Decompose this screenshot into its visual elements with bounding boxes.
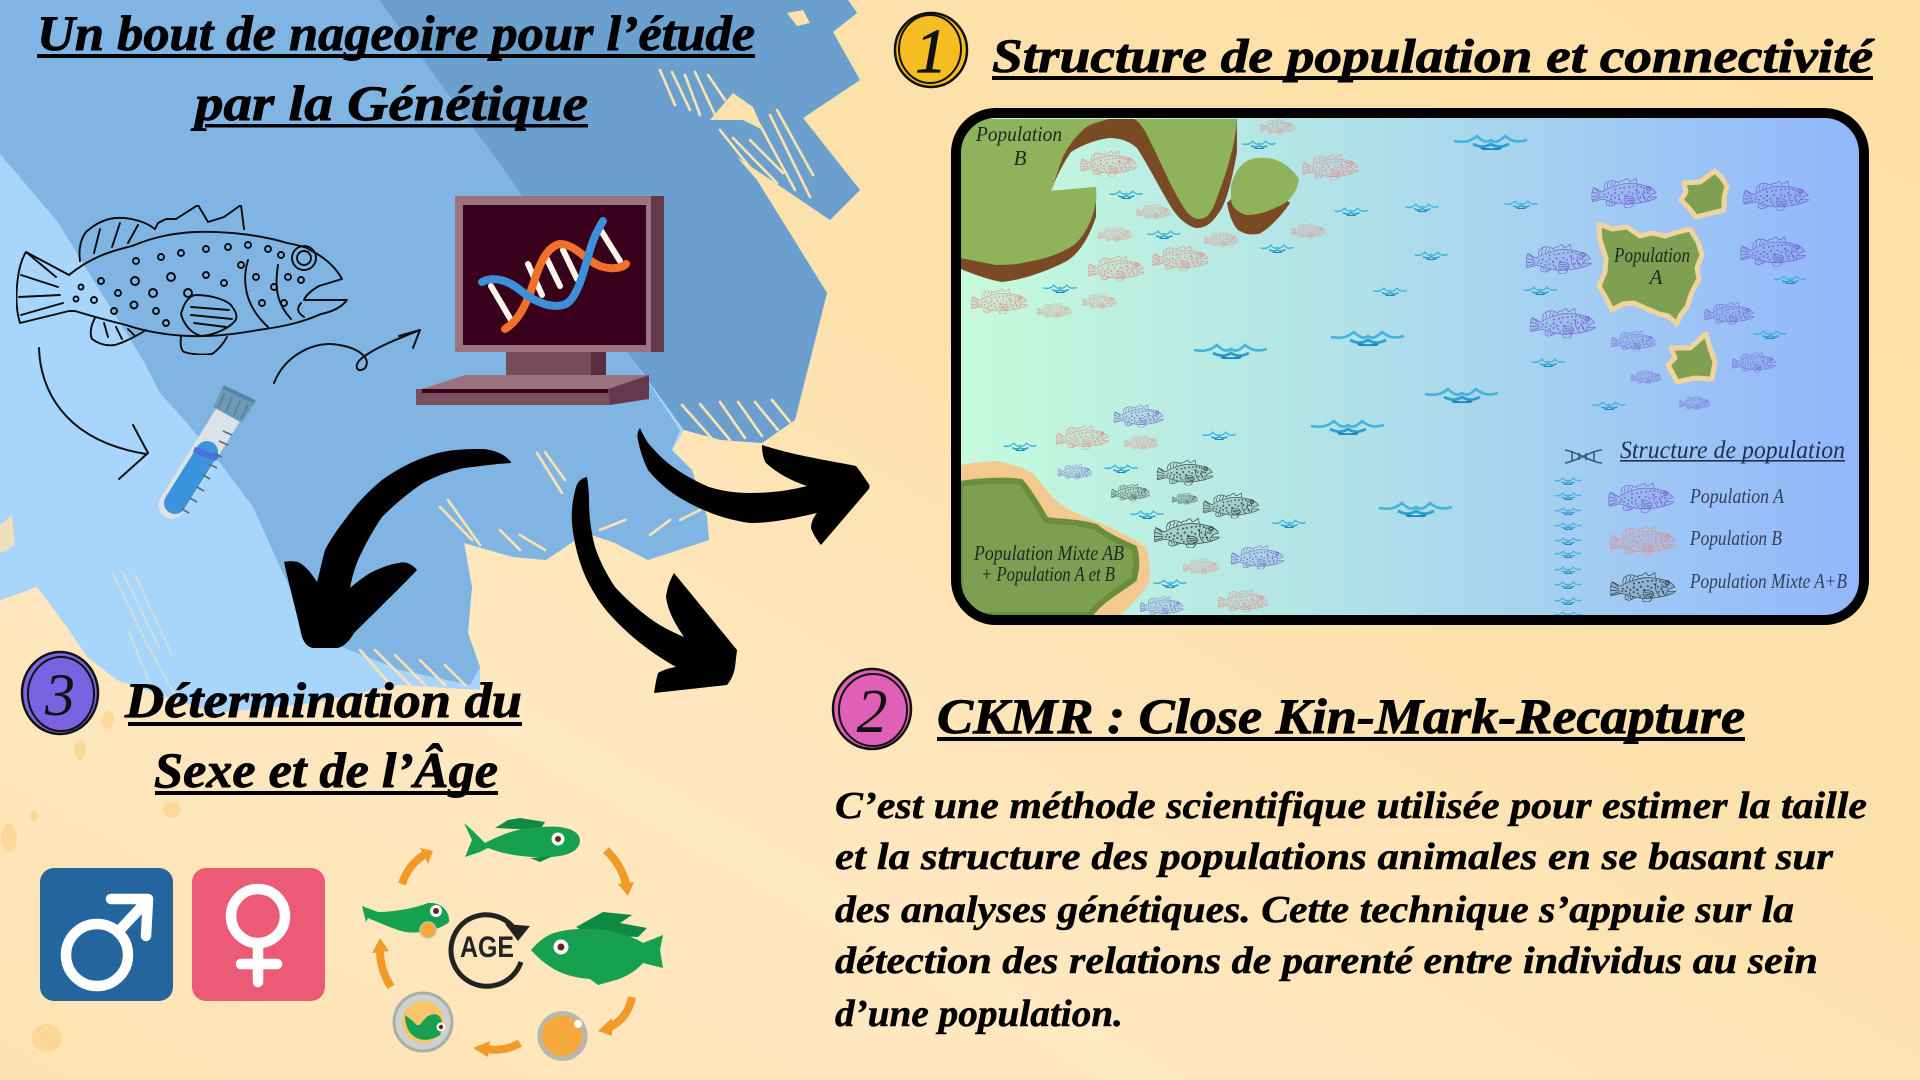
heading: section 3 — [124, 672, 522, 798]
title — [37, 5, 755, 131]
text block: CKMR description: des analyses génétiques. Cette technique s’appuie sur la — [835, 889, 1794, 931]
background: faint orange blobs — [1, 711, 181, 1052]
panel: population map — [956, 113, 1864, 620]
text block: CKMR description: et la structure des populations animales en se basant sur — [835, 836, 1834, 878]
icon: computer with DNA — [416, 196, 664, 405]
land: mixed population coast — [960, 461, 1150, 615]
label: mixed population: + Population A et B — [981, 562, 1115, 586]
text block: CKMR description: C’est une méthode scientifique utilisée pour estimer la taille — [835, 785, 1867, 827]
fish: population B — [971, 119, 1359, 612]
land: population A islands — [1599, 171, 1727, 382]
legend: Population A — [1689, 484, 1784, 508]
badge: number 3 — [22, 652, 98, 734]
badge: number 2 — [833, 669, 911, 749]
arrow: to map — [637, 428, 870, 545]
icon: age arrow: AGE — [460, 931, 514, 964]
icon: age arrow — [451, 915, 530, 986]
text block: CKMR description — [835, 785, 1867, 1035]
arrow: to section 2 — [572, 477, 737, 693]
chart: fish age cycle — [362, 818, 663, 1061]
label: population A — [1614, 247, 1690, 284]
icon: larva with yolk — [362, 903, 449, 938]
label: mixed population: Population Mixte AB — [973, 541, 1124, 565]
label: population B: Population — [975, 122, 1062, 146]
heading: section 1: Structure de population et connectivité — [992, 30, 1875, 83]
legend: Population B — [1689, 526, 1782, 550]
heading: section 3: Détermination du — [124, 672, 522, 728]
title: par la Génétique — [190, 75, 588, 131]
label: population A: A — [1648, 265, 1663, 289]
icon: cycle arrows — [372, 848, 634, 1057]
legend: Structure de population — [1620, 437, 1845, 464]
waves — [1003, 136, 1807, 619]
label: population B: B — [1014, 146, 1027, 170]
icon: adult fish — [531, 912, 663, 985]
arrow: fish to tube — [39, 348, 148, 479]
badge: number 1 — [895, 13, 967, 87]
icon: young fish — [464, 818, 580, 862]
label: mixed population — [974, 545, 1124, 586]
label: population B — [976, 126, 1062, 165]
icon: female symbol — [192, 868, 325, 1001]
fish: population A — [1058, 178, 1809, 616]
fish: mixed population — [1111, 460, 1259, 548]
text block: CKMR description: détection des relations de parenté entre individus au sein — [835, 940, 1818, 982]
icon: egg — [538, 1011, 588, 1061]
land: population B coast — [960, 119, 1299, 282]
icon: test tube — [172, 387, 255, 513]
badge: number 3: 3 — [44, 662, 75, 728]
icon: grouper fish line drawing — [16, 205, 347, 355]
legend: Population Mixte A+B — [1689, 569, 1847, 593]
text block: CKMR description: d’une population. — [835, 993, 1123, 1035]
heading: section 3: Sexe et de l’Âge — [154, 742, 498, 798]
title: Un bout de nageoire pour l’étude — [37, 5, 755, 61]
icon: embryo in egg — [394, 993, 452, 1051]
arrow: to section 3 — [284, 449, 511, 648]
badge: number 2: 2 — [856, 678, 888, 746]
legend — [1565, 437, 1847, 602]
badge: number 1: 1 — [916, 18, 946, 86]
heading: section 2: CKMR : Close Kin-Mark-Recapture — [937, 688, 1745, 744]
icon: male symbol — [40, 868, 173, 1001]
background: blue brush strokes — [0, 0, 860, 713]
arrow: tube to computer — [274, 330, 420, 383]
label: population A: Population — [1613, 243, 1690, 267]
